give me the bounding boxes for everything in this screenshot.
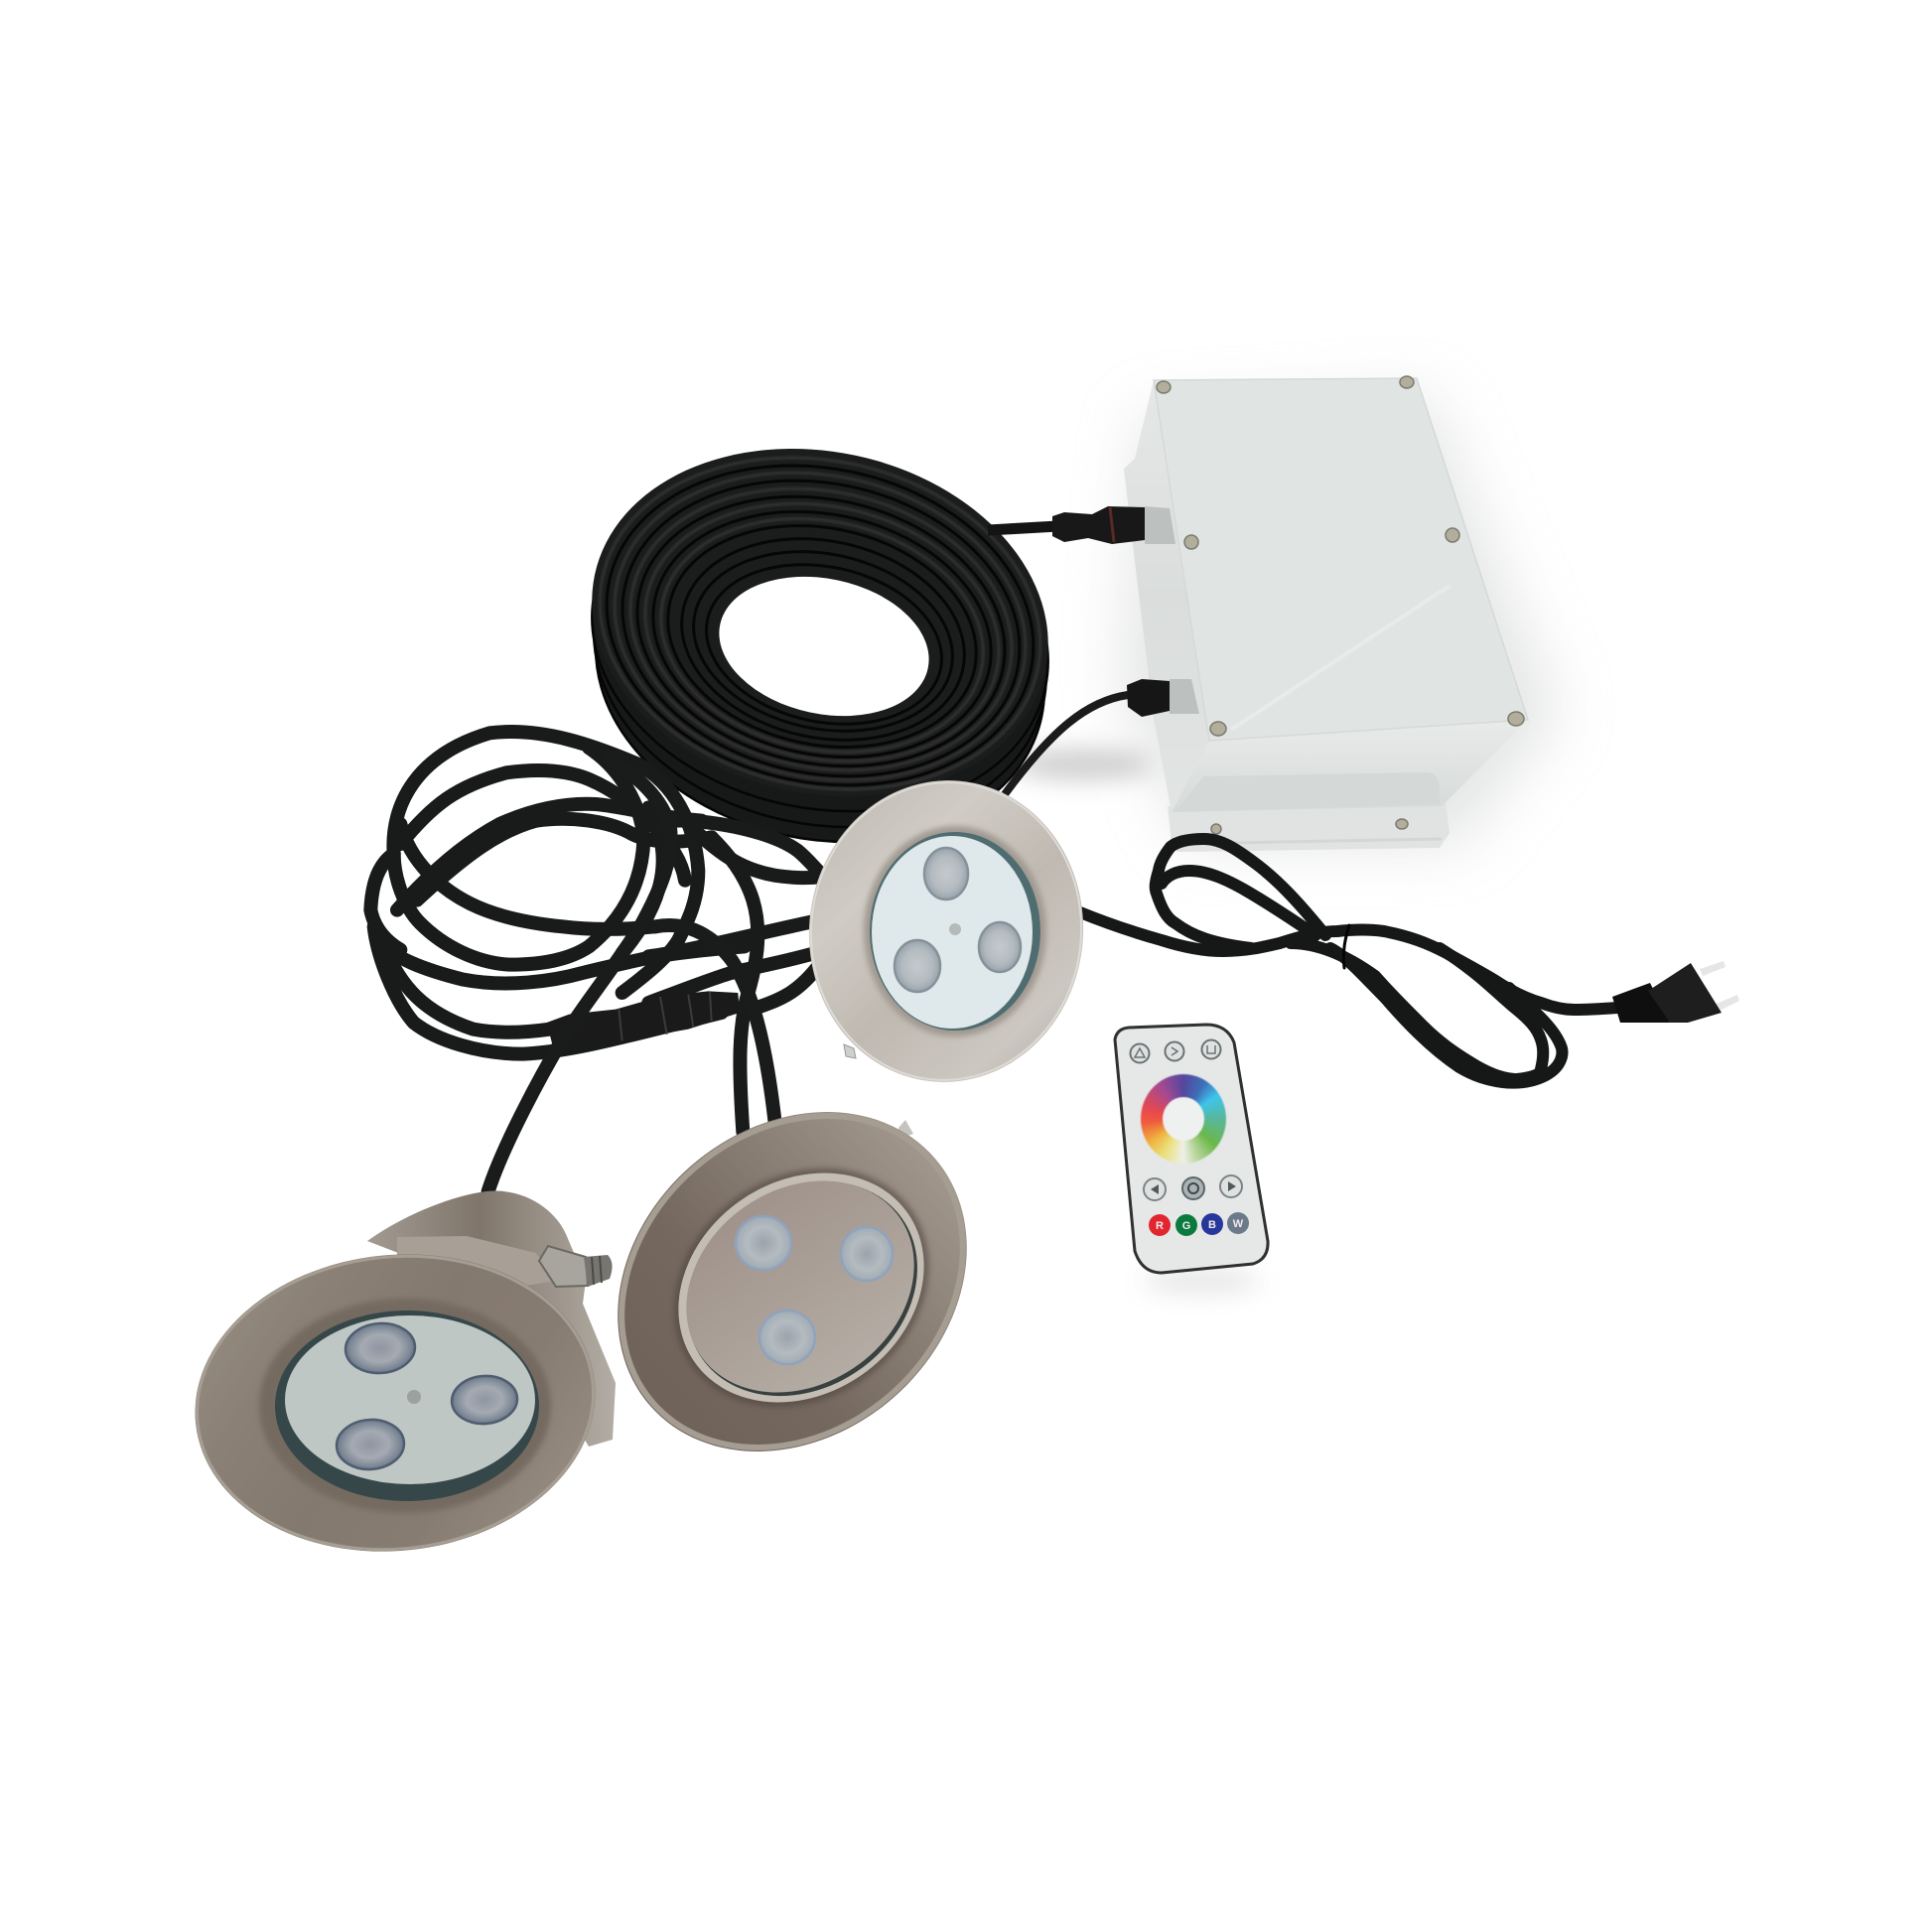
right twin cable [655,925,776,1132]
light 2 middle fixture [549,1041,1035,1522]
plug body [1648,963,1722,1023]
light 1 ring [796,769,1096,1093]
remote colour buttons: R [1156,1220,1164,1232]
box mounting flange [1168,802,1449,852]
wrapping loops [393,732,698,993]
box mount recess [1175,772,1440,812]
coil top winding [559,408,1081,837]
cord tie [1343,925,1349,968]
plug prongs [1700,961,1739,1012]
light 2 ring [549,1041,1035,1522]
light 1 lens plate [870,832,1040,1031]
light 3 LEDs [335,1321,519,1471]
light 3 bolt [539,1246,613,1287]
remote colour buttons: B [1208,1219,1216,1231]
light 1 center pin [949,923,961,935]
cord strands [1080,839,1617,1083]
remote middle buttons [1144,1175,1242,1200]
double strands [397,804,702,910]
left twin cable [712,837,758,1132]
coiled main cable [559,408,1081,883]
remote top buttons [1130,1040,1221,1062]
coil centre opening [706,558,942,735]
junction box [1124,376,1528,852]
light 1 tab [844,1044,856,1058]
box lid [1154,378,1528,741]
box front face [1172,720,1528,812]
cable to lower fixture [488,758,671,1191]
power cord [1080,839,1617,1083]
light 3 lower-left fixture [181,1191,616,1571]
coil lower stack [560,426,1080,883]
remote colour buttons [1149,1212,1249,1236]
light 3 housing [367,1191,616,1447]
remote colour buttons: G [1182,1220,1190,1232]
plug strain relief [1612,983,1670,1023]
lower strands [374,926,722,1054]
remote control body [1115,1025,1268,1273]
soft background shadows [1013,397,1559,1293]
inline cable connector [547,991,740,1045]
light 3 center pin [407,1390,421,1404]
remote colour buttons: W [1233,1218,1244,1230]
light 2 LEDs [736,1216,893,1364]
box screws [1157,376,1524,834]
light 2 lens plate [645,1138,959,1440]
loose cable bundle [370,732,821,1191]
light 1 LEDs [895,848,1021,992]
plug [1612,961,1739,1023]
light 1 upper fixture [796,769,1096,1093]
grey port blocks [1145,506,1175,544]
light 3 ring [181,1235,610,1571]
remote colour wheel [1141,1074,1226,1164]
top connector and cable [988,506,1145,544]
box left side [1124,380,1209,812]
coil winding grooves [577,427,1063,824]
coil winding highlights [569,418,1071,829]
bottom gland and cable [1005,679,1170,794]
light 2 tab [898,1120,913,1138]
light 3 lens plate [285,1315,535,1484]
